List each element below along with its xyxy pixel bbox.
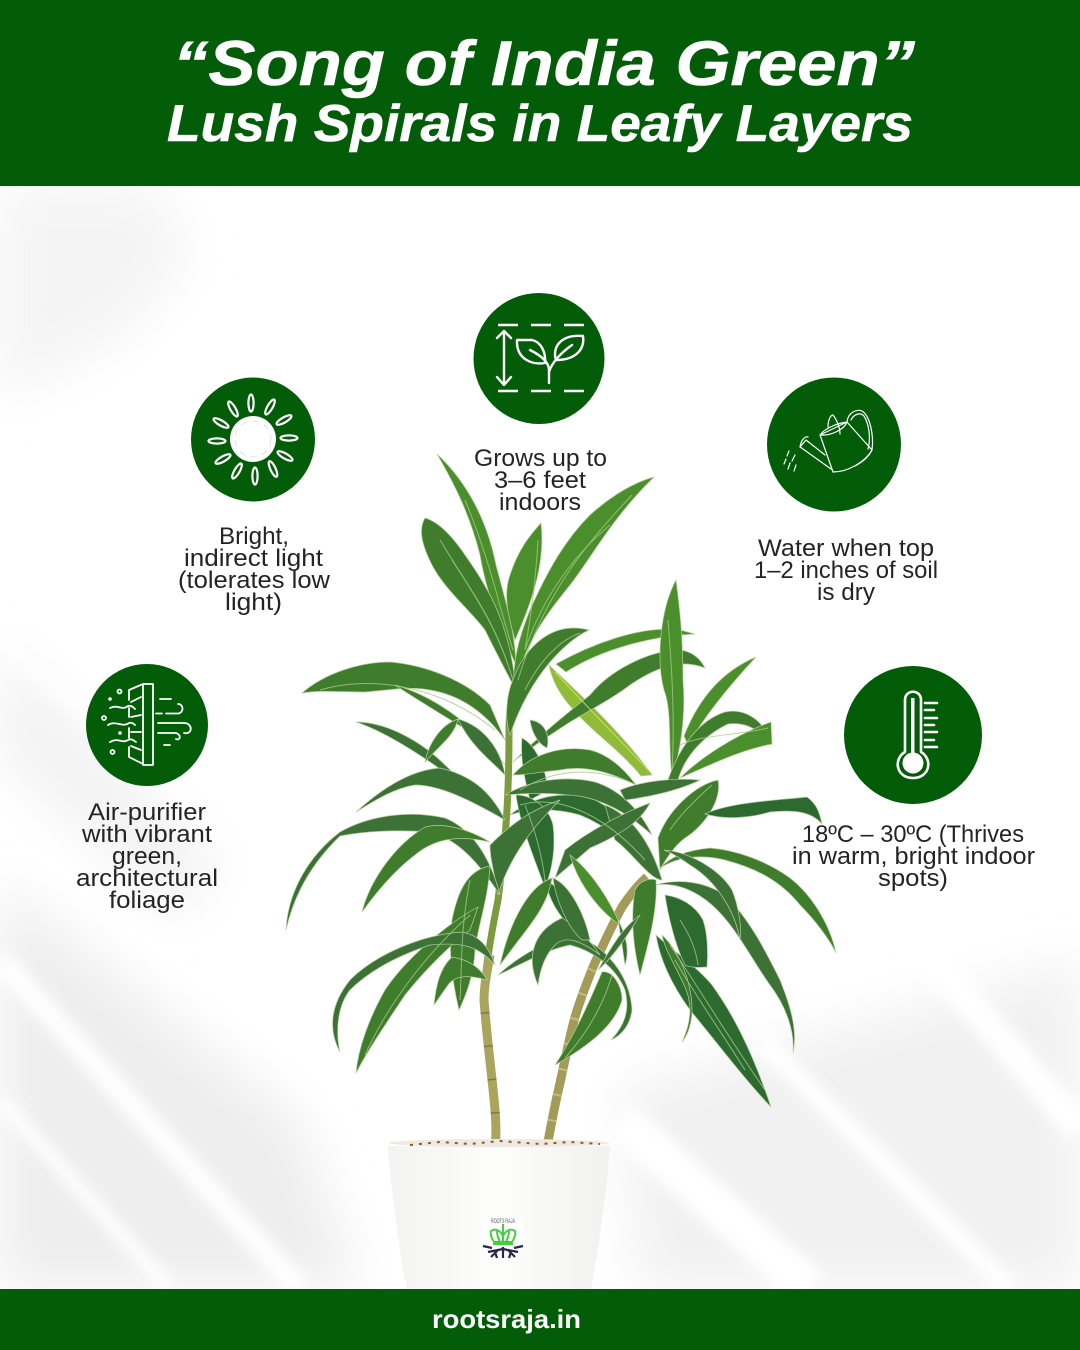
- watering text: 1–2 inches of soil: [754, 557, 938, 584]
- title banner: [0, 0, 1080, 186]
- watering text: is dry: [817, 579, 875, 606]
- temperature text: spots): [878, 865, 948, 892]
- title line 2: Lush Spirals in Leafy Layers: [167, 95, 913, 153]
- temperature text: in warm, bright indoor: [792, 843, 1035, 870]
- icon: watering can: [767, 378, 901, 512]
- light text: (tolerates low: [178, 567, 331, 594]
- leaf veins: [320, 495, 768, 1090]
- air purifying text: Air-purifier: [88, 799, 206, 826]
- icon: air filter: [86, 664, 208, 786]
- air purifying text: green,: [112, 843, 182, 870]
- lower left leaves: [286, 814, 552, 1073]
- card: watering: [754, 378, 938, 606]
- brand sticker on pot: ROOTS RAJA: [491, 1219, 515, 1225]
- watering text: [754, 535, 938, 606]
- temperature text: 18ºC – 30ºC (Thrives: [802, 821, 1024, 848]
- icon: sun: [191, 378, 315, 502]
- height text: Grows up to: [474, 445, 607, 472]
- air purifying text: foliage: [109, 887, 185, 914]
- air purifying text: architectural: [76, 865, 218, 892]
- icon: height and sprout: [474, 293, 604, 424]
- temperature text: [792, 821, 1035, 892]
- card: air purifying: [76, 664, 218, 914]
- height text: [474, 445, 607, 516]
- title line 1: “Song of India Green”: [173, 29, 916, 99]
- light text: light): [225, 589, 282, 616]
- icon: thermometer: [844, 666, 982, 804]
- footer bar: [0, 1289, 1080, 1350]
- light text: Bright,: [219, 523, 289, 550]
- brand sticker on pot: [480, 1214, 526, 1260]
- card: light requirement: [178, 378, 331, 616]
- potted plant: [286, 454, 836, 1289]
- stems: [484, 690, 647, 1147]
- light text: [178, 523, 331, 616]
- air purifying text: with vibrant: [81, 821, 212, 848]
- height text: 3–6 feet: [494, 467, 586, 494]
- card: temperature: [792, 666, 1035, 892]
- height text: indoors: [499, 489, 581, 516]
- watering text: Water when top: [758, 535, 934, 562]
- white pot: [388, 1139, 610, 1289]
- upper leaves: [302, 454, 772, 820]
- light text: indirect light: [184, 545, 323, 572]
- lower right leaves: [498, 848, 836, 1107]
- website: rootsraja.in: [432, 1304, 581, 1334]
- card: height: [474, 293, 607, 516]
- air purifying text: [76, 799, 218, 914]
- centre cluster leaves: [490, 738, 822, 936]
